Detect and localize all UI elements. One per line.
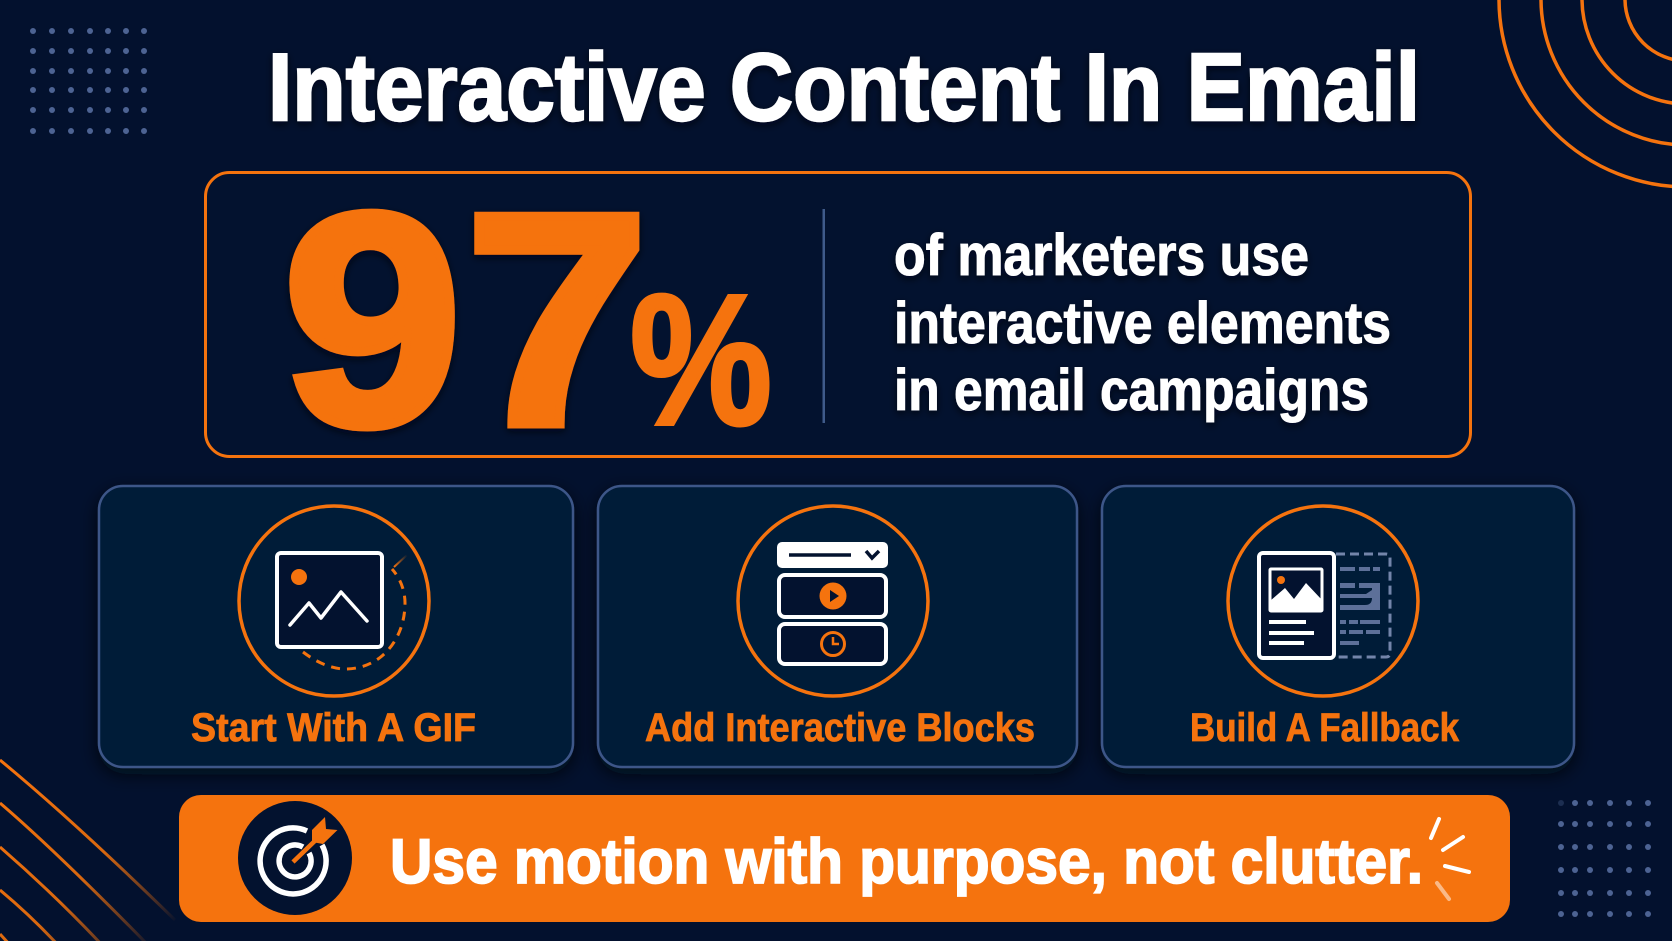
- dot pattern: bottom right: [1558, 800, 1651, 917]
- percent sign: %: [630, 257, 772, 464]
- big number 97: 9: [283, 151, 462, 488]
- panel: Add Interactive Blocks: [598, 486, 1077, 767]
- big number 97: [283, 151, 649, 488]
- big number 97: 7: [465, 151, 649, 488]
- banner text: Use motion with purpose, not clutter.: [390, 827, 1423, 897]
- icon: interactive blocks: [777, 542, 888, 664]
- panel: takeaway banner: [179, 795, 1510, 922]
- concentric arcs: top right: [1499, 0, 1672, 187]
- diagonal lines: bottom left: [0, 760, 175, 941]
- panel: Build A Fallback: [1102, 486, 1574, 767]
- dot pattern: top left: [30, 28, 147, 134]
- icon: email with dashed fallback: [1259, 553, 1390, 658]
- title: Interactive Content In Email: [268, 34, 1420, 141]
- statistic description: [894, 223, 1391, 423]
- icon: target with arrow: [238, 801, 352, 915]
- panel: 97 percent statistic: [206, 151, 1470, 488]
- label: Add Interactive Blocks: [645, 706, 1035, 750]
- icon: image with motion arc: [277, 553, 407, 669]
- icon: sparkle rays: [1431, 819, 1469, 899]
- label: Build A Fallback: [1190, 706, 1460, 750]
- statistic description: in email campaigns: [894, 358, 1369, 423]
- statistic description: interactive elements: [894, 291, 1391, 356]
- statistic description: of marketers use: [894, 223, 1309, 288]
- panel: Start With A GIF: [99, 486, 573, 767]
- label: Start With A GIF: [191, 706, 476, 750]
